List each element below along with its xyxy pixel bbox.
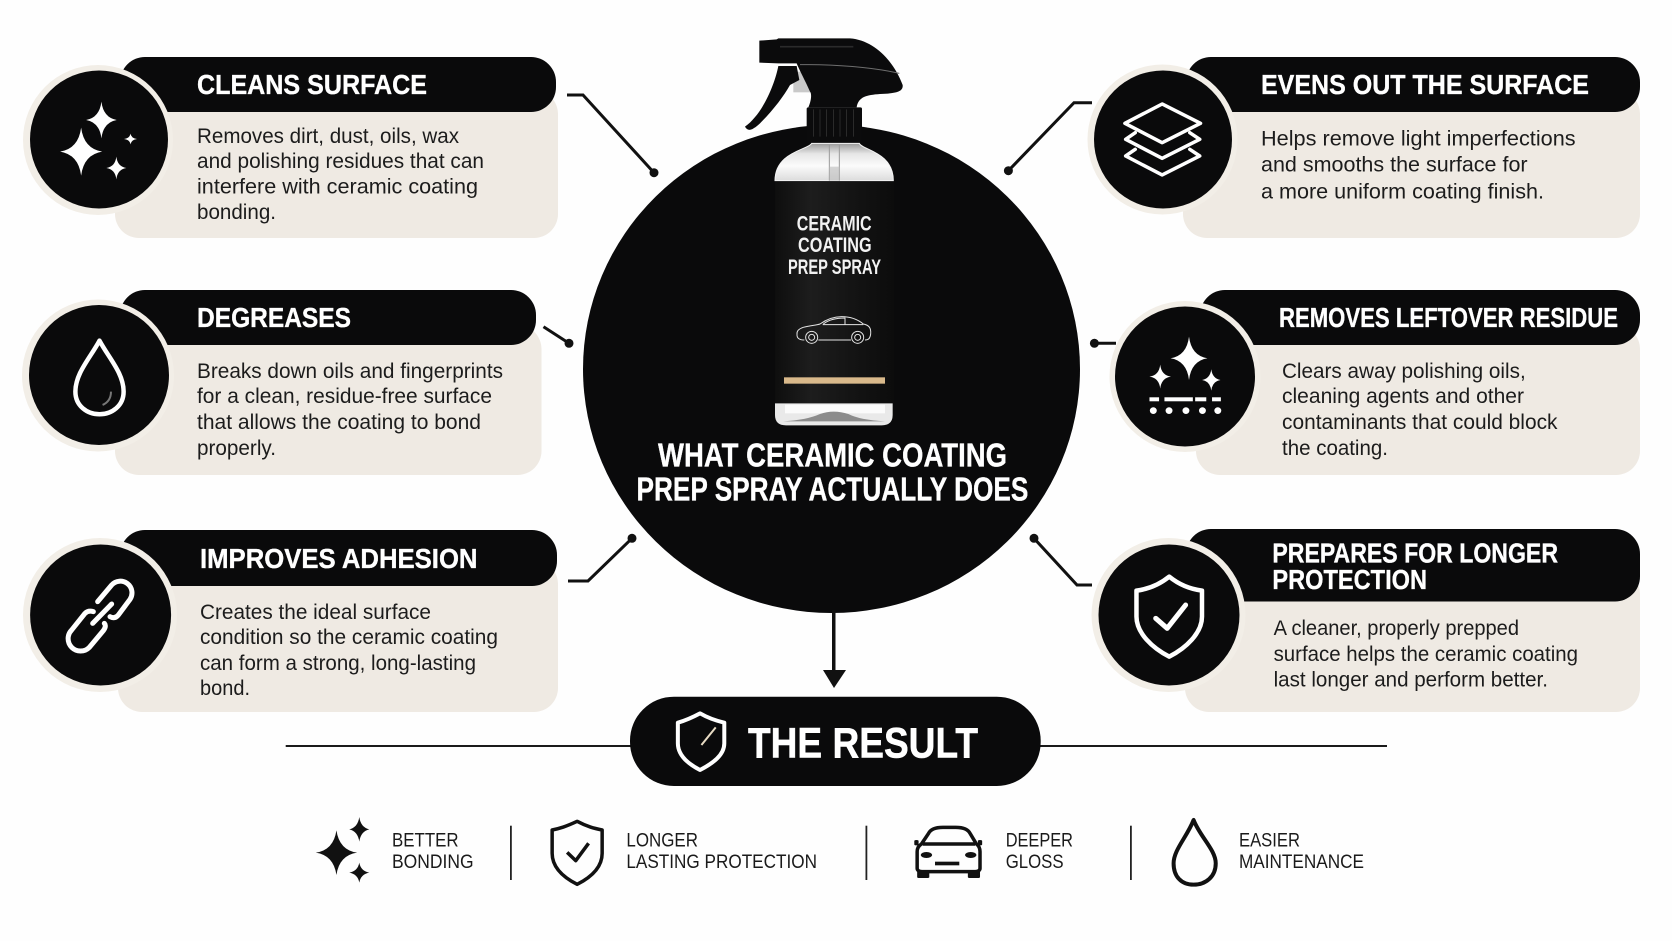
body text: A cleaner, properly prepped	[1274, 617, 1519, 640]
connector: improves adhesion	[568, 534, 636, 581]
connector: prepares for longer protection	[1030, 534, 1092, 585]
body text	[1261, 128, 1576, 203]
title: PREP SPRAY ACTUALLY DOES	[636, 471, 1028, 508]
connector: removes leftover residue	[1090, 339, 1116, 348]
body text: for a clean, residue-free surface	[197, 385, 492, 408]
icon: chain link	[68, 581, 132, 651]
body text	[197, 360, 503, 460]
body text: Creates the ideal surface	[200, 601, 431, 624]
icon: shield	[678, 713, 724, 770]
connector: cleans surface	[567, 95, 658, 177]
body text: cleaning agents and other	[1282, 385, 1524, 408]
body text: surface helps the ceramic coating	[1274, 643, 1578, 666]
panel: prepares for longer protection	[1092, 529, 1640, 712]
central black circle	[583, 125, 1080, 613]
body text: a more uniform coating finish.	[1261, 180, 1544, 203]
body text: bond.	[200, 677, 250, 700]
result item: longer lasting protection: LASTING PROTECTION	[626, 851, 817, 873]
body text: and polishing residues that can	[197, 150, 484, 173]
bottle label text: COATING	[798, 234, 872, 257]
result item: easier maintenance: EASIER	[1239, 830, 1300, 852]
panel: evens out the surface	[1088, 57, 1640, 238]
gold stripe	[784, 377, 885, 384]
body text: can form a strong, long-lasting	[200, 652, 476, 675]
result item: easier maintenance: MAINTENANCE	[1239, 851, 1364, 873]
icon: shield check	[1136, 577, 1202, 657]
body text	[200, 601, 498, 700]
icon: drop	[75, 341, 124, 414]
body text: Helps remove light imperfections	[1261, 128, 1576, 151]
heading: IMPROVES ADHESION	[200, 543, 478, 574]
body text: condition so the ceramic coating	[200, 626, 498, 649]
heading: EVENS OUT THE SURFACE	[1261, 69, 1589, 100]
title: WHAT CERAMIC COATING	[658, 437, 1007, 474]
body text: that allows the coating to bond	[197, 411, 481, 434]
heading: DEGREASES	[197, 302, 351, 333]
heading: PROTECTION	[1272, 564, 1427, 595]
result item: longer lasting protection	[552, 821, 817, 884]
icon: sparkles over residue	[1149, 337, 1221, 414]
panel: removes leftover residue	[1110, 290, 1640, 475]
panel: improves adhesion	[23, 530, 558, 712]
result divider line	[286, 745, 1387, 747]
heading	[1272, 538, 1558, 595]
body text: contaminants that could block	[1282, 411, 1558, 434]
body text: last longer and perform better.	[1274, 669, 1548, 692]
body text: bonding.	[197, 201, 276, 224]
body text: Clears away polishing oils,	[1282, 360, 1526, 383]
bottle label text: PREP SPRAY	[788, 256, 881, 279]
body text: the coating.	[1282, 437, 1388, 460]
result item: deeper gloss: GLOSS	[1006, 851, 1064, 873]
result item: easier maintenance	[1174, 820, 1364, 885]
bottle label text	[788, 213, 881, 279]
panel: cleans surface	[23, 57, 558, 238]
spray bottle	[745, 38, 903, 425]
body text: properly.	[197, 437, 276, 460]
result item: better bonding	[316, 817, 474, 883]
body text: Breaks down oils and fingerprints	[197, 360, 503, 383]
result heading: THE RESULT	[748, 719, 978, 767]
icon: car outline	[797, 317, 871, 343]
result item: better bonding: BETTER	[392, 830, 459, 852]
icon: sparkles	[60, 102, 137, 179]
body text	[197, 125, 484, 224]
body text	[1274, 617, 1578, 692]
result item: better bonding: BONDING	[392, 851, 474, 873]
heading: CLEANS SURFACE	[197, 69, 427, 100]
result strip	[316, 817, 1364, 885]
trigger sprayer head	[745, 38, 903, 181]
panel: degreases	[22, 290, 542, 475]
bottle label text: CERAMIC	[797, 213, 872, 236]
connector: degreases	[544, 327, 574, 348]
result item: deeper gloss: DEEPER	[1006, 830, 1073, 852]
result item: longer lasting protection: LONGER	[626, 830, 698, 852]
body text: interfere with ceramic coating	[197, 176, 478, 198]
result pill	[630, 697, 1041, 786]
bottle base	[775, 317, 893, 425]
body text: and smooths the surface for	[1261, 154, 1528, 177]
body text	[1282, 360, 1558, 460]
connector: evens out the surface	[1004, 103, 1092, 175]
heading: PREPARES FOR LONGER	[1272, 538, 1558, 569]
icon: layers	[1125, 104, 1201, 175]
arrow to result	[823, 610, 846, 688]
result item: deeper gloss	[914, 827, 1073, 878]
bottle label	[775, 182, 894, 403]
title	[636, 437, 1028, 508]
body text: Removes dirt, dust, oils, wax	[197, 125, 459, 148]
